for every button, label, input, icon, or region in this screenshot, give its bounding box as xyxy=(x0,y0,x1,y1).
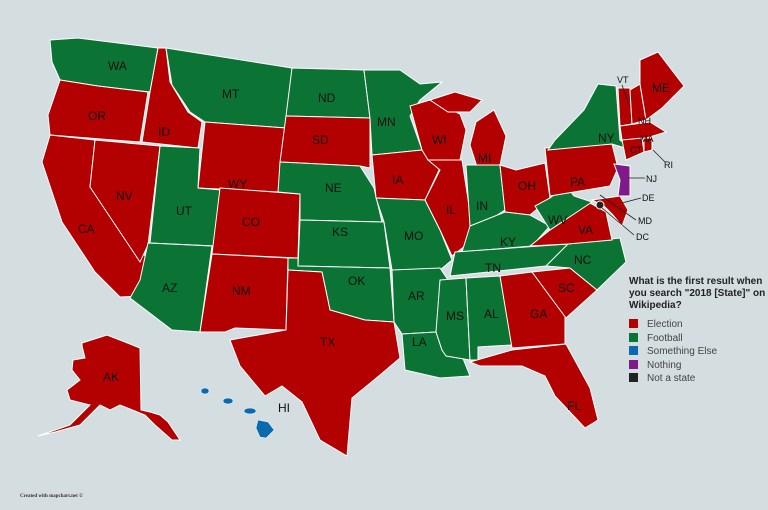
state: HI: HI xyxy=(278,401,290,415)
state: OH xyxy=(500,163,550,215)
state: CA: CA xyxy=(78,222,95,236)
state: AL: AL xyxy=(484,307,499,321)
state: WY xyxy=(198,122,286,192)
legend items xyxy=(629,319,717,384)
state: MT: MT xyxy=(222,87,240,101)
state: NE: NE xyxy=(325,181,342,195)
state: CO: CO xyxy=(242,215,260,229)
legend xyxy=(629,276,765,384)
state: NE xyxy=(278,162,382,222)
state: AR xyxy=(392,268,448,334)
state: IA xyxy=(372,150,440,200)
state: NV: NV xyxy=(116,189,133,203)
legend title: What is the first result when you search "2018 [State]" on Wikipedia? xyxy=(629,276,765,311)
state: CA xyxy=(42,135,150,297)
map: DE xyxy=(642,193,655,203)
state: UT: UT xyxy=(176,204,193,218)
state: GA: GA xyxy=(530,307,547,321)
state: VT NH ME MA CT RI xyxy=(618,52,684,160)
legend items: Football xyxy=(647,333,683,344)
state: MO: MO xyxy=(404,229,423,243)
state: IL xyxy=(425,160,472,256)
map: VT xyxy=(617,75,629,85)
map: NJ xyxy=(646,174,657,184)
state: VT NH ME MA CT RI: ME xyxy=(652,81,670,95)
state: AK xyxy=(38,335,180,440)
state: MN: MN xyxy=(377,115,396,129)
state: MI: MI xyxy=(478,151,491,165)
state: FL xyxy=(470,344,598,428)
state: ID: ID xyxy=(158,125,170,139)
state: VT NH ME MA CT RI: CT xyxy=(630,145,642,155)
map: MD xyxy=(638,216,652,226)
state: MD/DE xyxy=(592,196,628,226)
state: MT xyxy=(166,48,292,128)
credit: Created with mapchart.net © xyxy=(20,494,83,499)
state: TN xyxy=(450,244,568,276)
map: RI xyxy=(664,160,673,170)
state: LA xyxy=(402,332,470,378)
state: MN xyxy=(364,70,442,155)
state: FL: FL xyxy=(567,399,581,413)
state: SD: SD xyxy=(312,133,329,147)
state: SC: SC xyxy=(558,281,575,295)
state: KS xyxy=(298,220,390,268)
state: MI xyxy=(430,92,506,170)
state: NY xyxy=(548,84,632,150)
state: MO xyxy=(376,198,452,270)
state: PA: PA xyxy=(570,175,585,189)
state: NC xyxy=(546,238,626,290)
state: WY: WY xyxy=(228,177,247,191)
state: IL: IL xyxy=(446,203,456,217)
state: SD xyxy=(280,116,370,168)
state: ND xyxy=(286,68,370,118)
state: NC: NC xyxy=(574,253,592,267)
state: OK xyxy=(288,258,394,322)
callout labels xyxy=(600,85,665,235)
state: IA: IA xyxy=(392,173,403,187)
state: AR: AR xyxy=(408,289,425,303)
state: OH: OH xyxy=(518,179,536,193)
state: WA: WA xyxy=(108,59,127,73)
state: AL xyxy=(466,276,512,360)
legend items: Not a state xyxy=(647,373,695,384)
state: IN: IN xyxy=(476,199,488,213)
state: ND: ND xyxy=(318,91,336,105)
state: TX: TX xyxy=(320,335,335,349)
state: CO xyxy=(212,188,300,258)
state: SC xyxy=(532,268,597,318)
state: NV xyxy=(90,140,160,262)
state: AZ: AZ xyxy=(162,281,177,295)
state: GA xyxy=(500,272,565,348)
state: TX xyxy=(230,270,400,456)
state: LA: LA xyxy=(412,335,427,349)
state: MS xyxy=(436,278,470,360)
state: KS: KS xyxy=(332,225,348,239)
state: WV: WV xyxy=(548,213,567,227)
state: KY: KY xyxy=(500,235,516,249)
state: NM xyxy=(200,254,288,332)
state: WI: WI xyxy=(432,133,447,147)
state: AK: AK xyxy=(103,370,119,384)
state: NJ xyxy=(614,164,630,196)
state: VA xyxy=(530,202,612,246)
state: VA: VA xyxy=(578,223,593,237)
state: OK: OK xyxy=(348,274,365,288)
state: VT NH ME MA CT RI: NH xyxy=(638,116,651,126)
state: HI xyxy=(201,388,290,438)
state: ID xyxy=(142,48,202,148)
state: KY xyxy=(462,212,550,252)
state: IN xyxy=(466,165,505,226)
state: NM: NM xyxy=(232,284,251,298)
state: TN: TN xyxy=(485,261,501,275)
state: PA xyxy=(545,144,618,196)
legend items: Something Else xyxy=(647,346,717,357)
state: VT NH ME MA CT RI: MA xyxy=(640,134,654,144)
state: UT xyxy=(150,146,222,246)
map: DC xyxy=(636,232,649,242)
state: AZ xyxy=(130,243,212,332)
state: OR: OR xyxy=(88,109,106,123)
state: WV xyxy=(535,186,592,230)
state: NY: NY xyxy=(598,131,615,145)
state: OR xyxy=(48,80,148,142)
legend items: Election xyxy=(647,319,683,330)
dc marker xyxy=(596,201,604,209)
state: WI xyxy=(410,100,466,160)
state: MS: MS xyxy=(446,309,464,323)
legend items: Nothing xyxy=(647,360,681,371)
state: WA xyxy=(50,38,158,92)
